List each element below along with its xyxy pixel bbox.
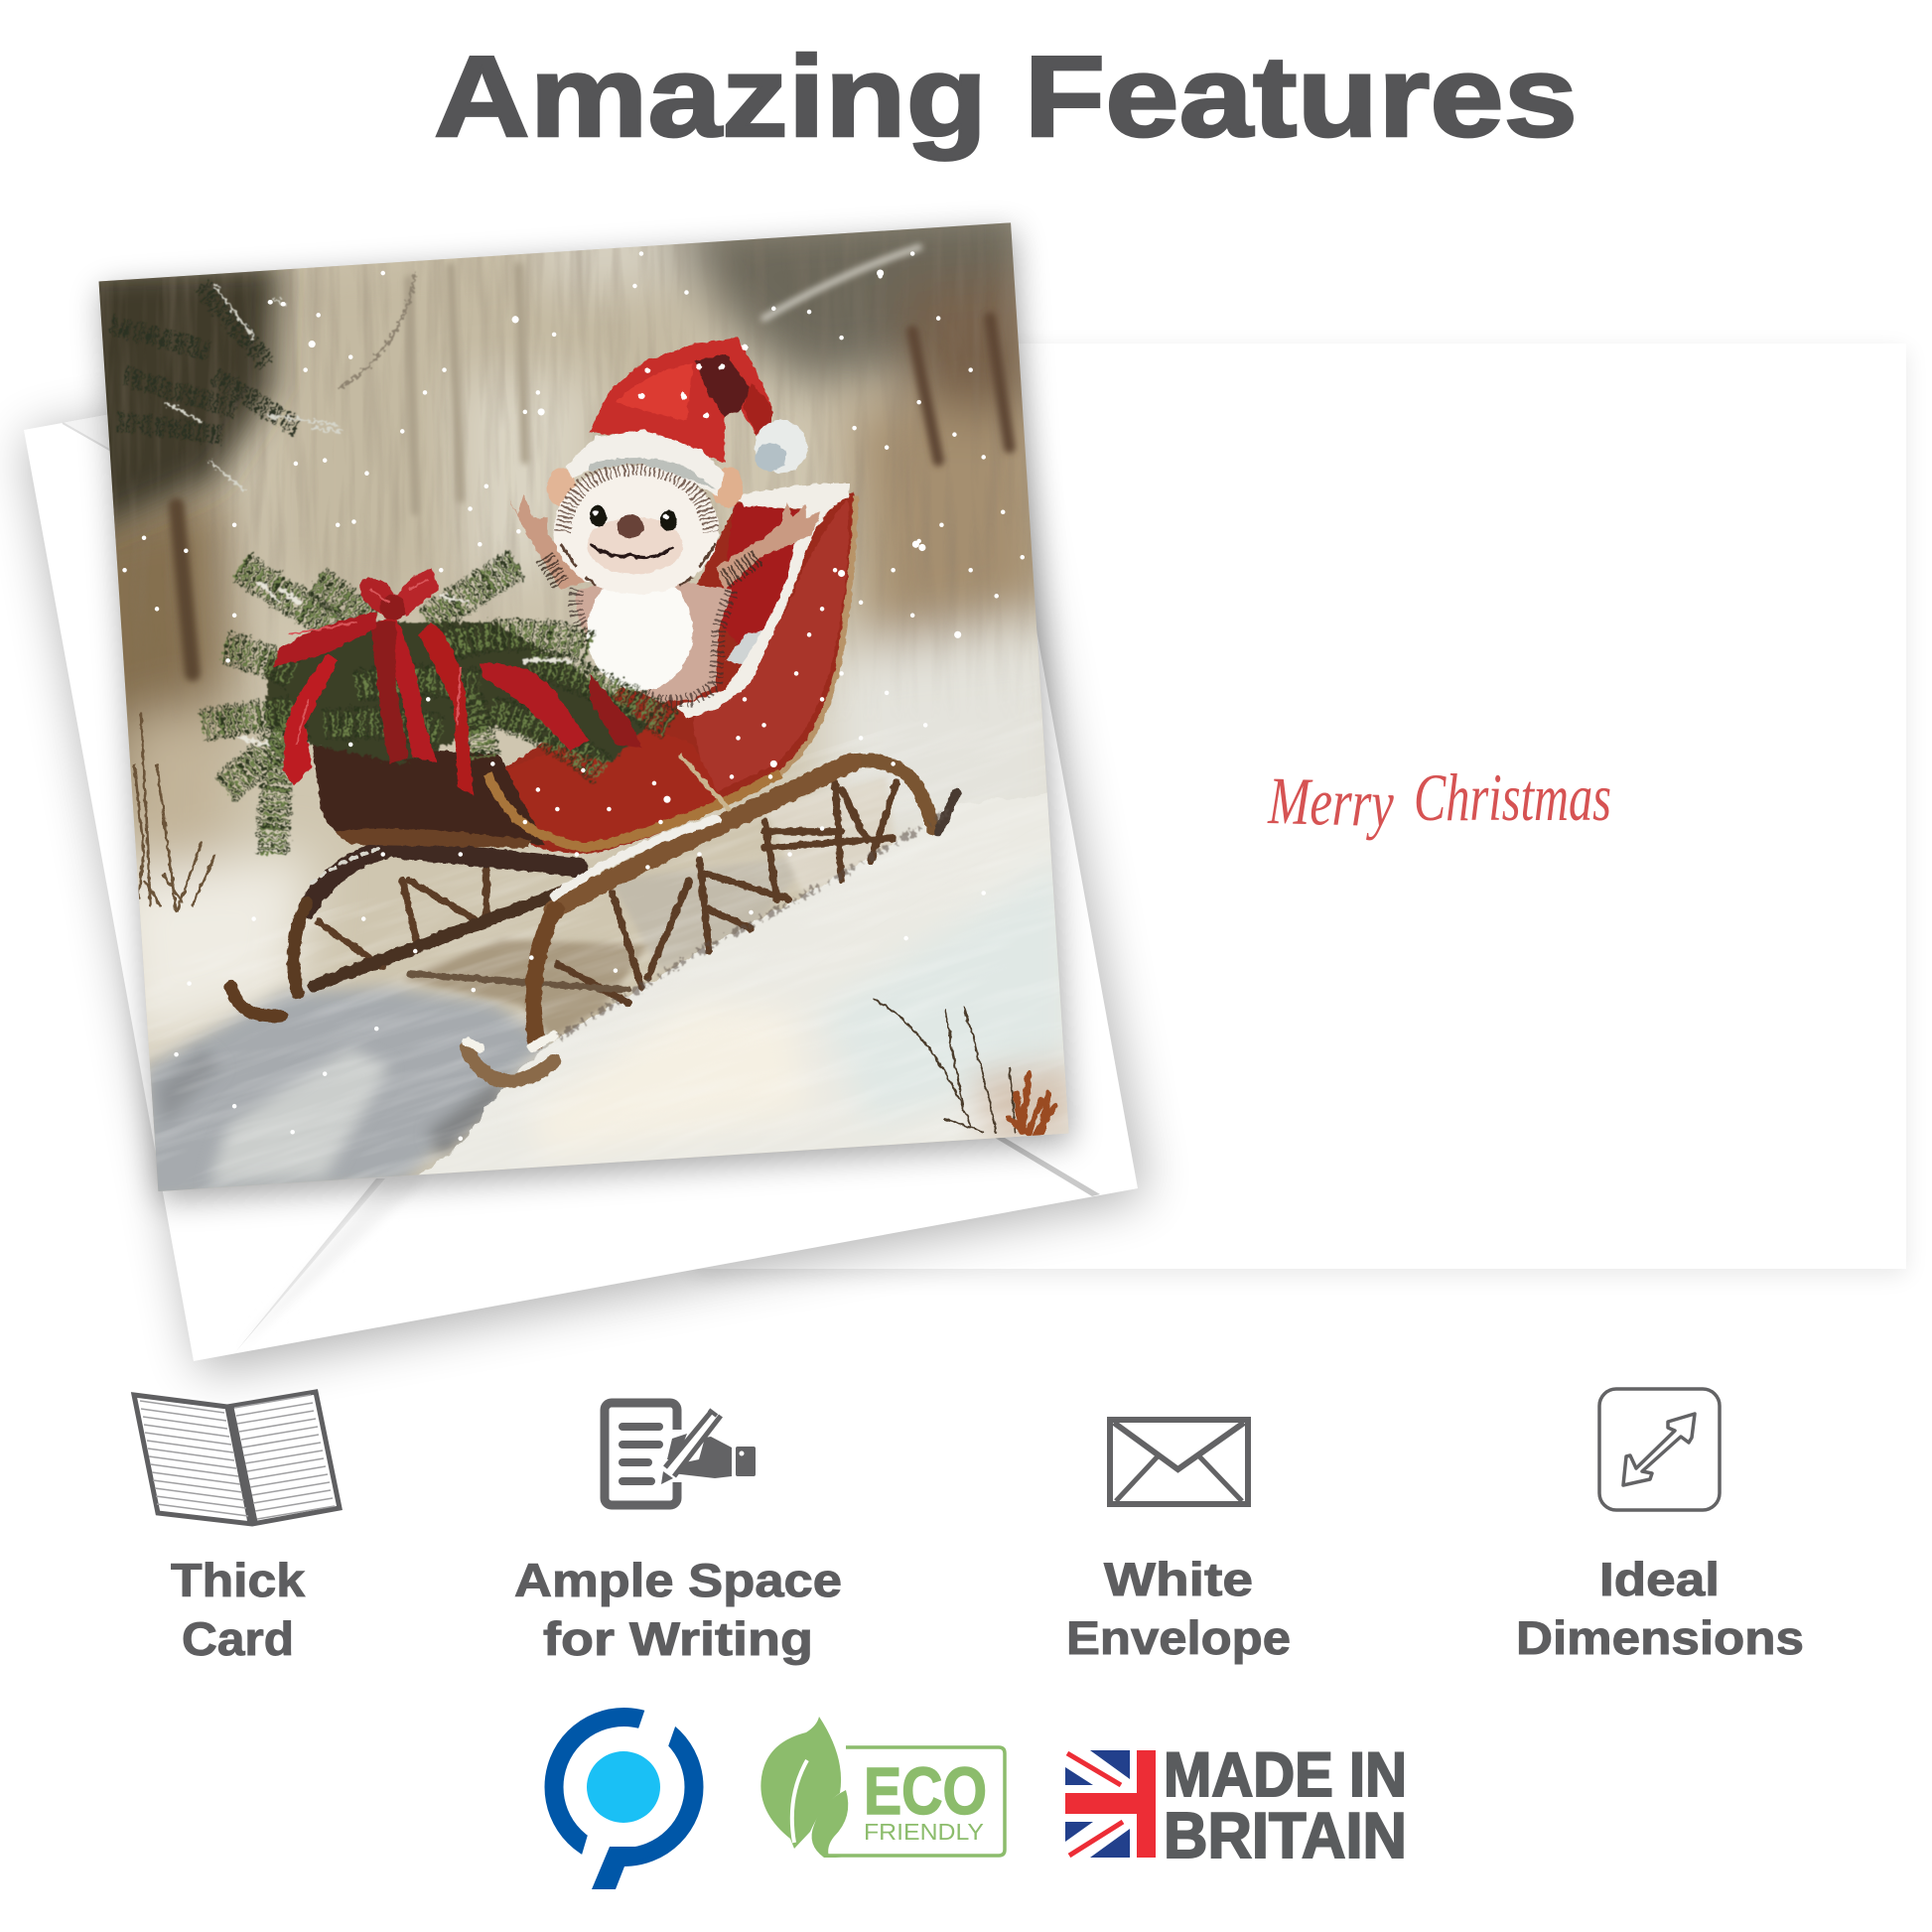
feature: white envelope	[1066, 1420, 1291, 1664]
badge: made in britain: BRITAIN	[1164, 1799, 1407, 1871]
dry grass bottom right	[874, 1000, 1054, 1135]
painting background washes	[113, 222, 1046, 1060]
envelope flap fold left	[235, 1178, 427, 1352]
red ribbon bow	[273, 568, 641, 796]
hedgehog arms	[509, 494, 821, 590]
feature: ample space	[514, 1403, 842, 1665]
label: Ample Space	[514, 1554, 842, 1606]
falling snow	[125, 254, 1023, 1139]
fir branch top-left	[112, 273, 415, 492]
label: Ideal	[1599, 1553, 1720, 1605]
greeting: Christmas	[1414, 759, 1611, 835]
hedgehog head	[553, 465, 719, 594]
panel: white envelope	[24, 258, 1146, 1373]
icon: writing hand on document	[605, 1403, 756, 1505]
eco text panel	[824, 1747, 1005, 1856]
sleigh spokes	[319, 783, 897, 1003]
hedgehog	[509, 338, 821, 703]
envelope flap fold right	[995, 1138, 1100, 1196]
icon: union flag	[1065, 1750, 1156, 1858]
panel: inside of card	[695, 344, 1906, 1275]
panel: card front painting	[83, 214, 1089, 1218]
title: Amazing Features	[434, 32, 1578, 161]
lit snow bank	[419, 792, 1068, 1175]
feature: thick card: Card	[182, 1612, 294, 1665]
envelope flap fold top-left	[63, 414, 111, 451]
icon: diagonal resize arrow	[1599, 1389, 1720, 1510]
feature: ample space: for Writing	[543, 1612, 813, 1665]
feature: thick card	[134, 1392, 340, 1665]
underside of sleigh shadow	[401, 776, 899, 1038]
greeting: Merry	[1267, 762, 1395, 841]
icon: green leaf	[760, 1717, 848, 1858]
label: White	[1104, 1553, 1253, 1605]
feature: ideal dimensions	[1516, 1389, 1804, 1664]
badge: made in britain	[1065, 1740, 1407, 1871]
fir garland	[203, 564, 670, 855]
icon: envelope	[1110, 1420, 1248, 1504]
painted brush texture	[100, 244, 977, 646]
badge: blue paper certification logo	[554, 1700, 694, 1898]
greeting	[1267, 759, 1611, 841]
badge: eco friendly: FRIENDLY	[864, 1819, 984, 1845]
snow bank edge	[553, 812, 948, 1041]
snow on sleigh edge	[677, 483, 850, 719]
hedgehog ears	[547, 467, 744, 508]
tree trunks in the distance	[177, 247, 1010, 673]
icon: open book card	[134, 1392, 340, 1526]
badge: eco friendly: ECO	[864, 1754, 987, 1829]
label: Thick	[171, 1554, 306, 1606]
hedgehog body	[576, 572, 732, 703]
sleigh body	[312, 492, 856, 854]
sleigh runners	[231, 760, 956, 1081]
feature: white envelope: Envelope	[1066, 1611, 1291, 1664]
santa hat	[566, 338, 807, 495]
badge: eco friendly	[760, 1717, 1005, 1858]
dry grass left	[134, 712, 215, 912]
grey snow path	[144, 987, 553, 1203]
badge text: MADE IN	[1164, 1740, 1407, 1810]
feature: ideal dimensions: Dimensions	[1516, 1611, 1804, 1664]
